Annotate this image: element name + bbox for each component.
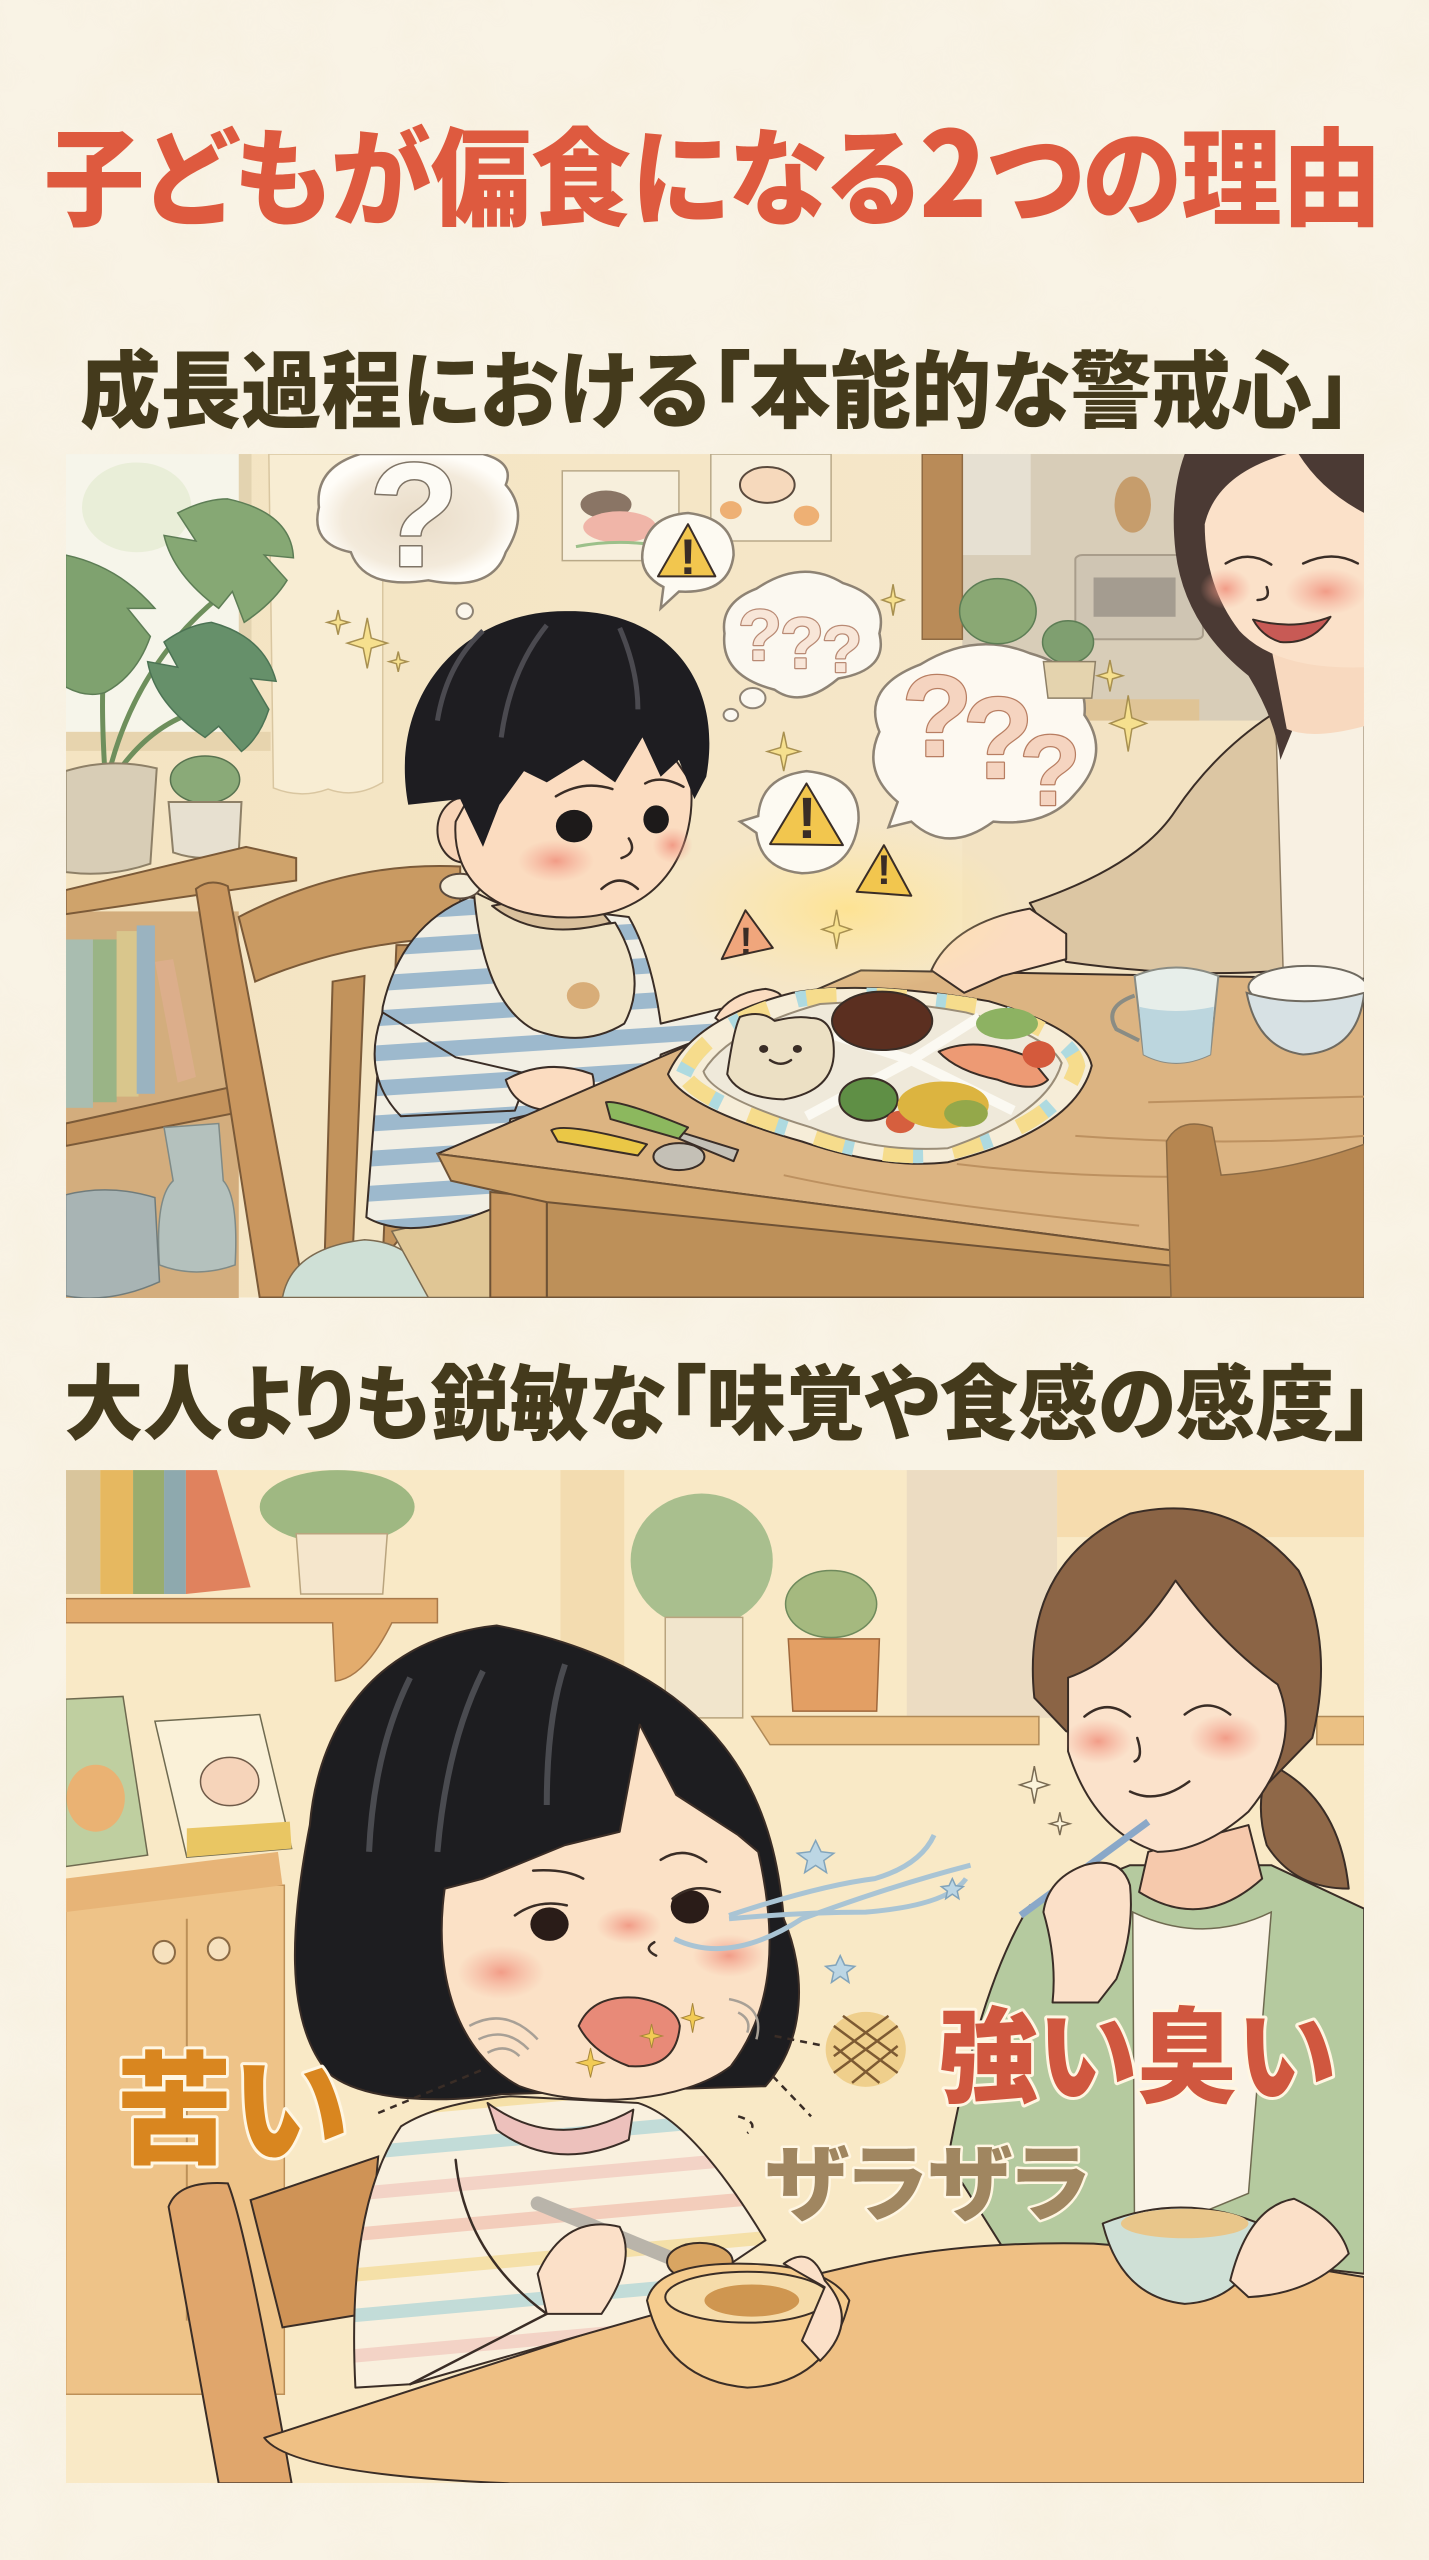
door frame: [922, 454, 962, 639]
cabinet: [66, 1852, 284, 2394]
hair: [405, 611, 709, 847]
cheeks: [457, 1946, 545, 1999]
ear: [437, 797, 492, 863]
eyes: [556, 810, 592, 842]
corn and peas: [898, 1081, 989, 1129]
label: strong smell: 強い臭い: [938, 2001, 1336, 2117]
exclamation marks: [680, 529, 891, 963]
girl's bowl and spoon: [538, 2203, 849, 2388]
question marks: middle bubble: ?: [780, 604, 824, 684]
window with light: [66, 454, 271, 751]
under table shade: [428, 1170, 1176, 1298]
mother: [1030, 454, 1367, 979]
hand: [375, 1012, 529, 1116]
mother's sparkles: [1020, 1766, 1070, 1835]
question marks: large bubble: ?: [902, 651, 972, 781]
blue stars: [797, 1840, 963, 1982]
cardigan: [948, 1865, 1364, 2274]
panel: girl sensitive to taste and texture illustration: [66, 1470, 1364, 2483]
face: [1068, 1581, 1286, 1852]
white shirt: [1133, 1912, 1271, 2240]
striped shirt: [365, 896, 722, 1230]
table: [437, 970, 1364, 1298]
table: [264, 2243, 1364, 2483]
small succulent: [169, 756, 241, 858]
title: 子どもが偏食になる2つの理由: [44, 80, 1382, 251]
rice bowl: [1247, 966, 1367, 1055]
curtain: [269, 454, 383, 794]
sparkles: [327, 584, 1146, 949]
neck: [1139, 1825, 1262, 1909]
bookshelf: [66, 847, 296, 1299]
large plant pot: [66, 763, 157, 874]
boy's hand on table: [715, 989, 782, 1029]
bib knot: [440, 874, 480, 899]
monstera plant: [66, 499, 293, 771]
salmon: [939, 1044, 1048, 1087]
question marks: large bubble: ?: [963, 673, 1033, 803]
wall drawings: [562, 454, 831, 561]
glass of water: [1112, 968, 1218, 1063]
boy: [365, 611, 722, 1298]
exclamation marks: !: [740, 921, 752, 963]
chair: [169, 2157, 378, 2483]
window plant: [631, 1494, 773, 1718]
lower right shelf: [752, 1717, 1364, 1745]
thought bubble: top: [317, 454, 518, 619]
front chair: [1166, 1124, 1364, 1298]
warning triangle: top: [658, 524, 715, 576]
hamburger steak: [832, 992, 932, 1050]
plate with food: [668, 988, 1092, 1164]
tongue: [579, 1997, 680, 2066]
girl: [295, 1625, 799, 2388]
window frames: [560, 1470, 1364, 1735]
smell waves: [674, 1835, 971, 1949]
glow: [674, 824, 1021, 993]
face: [455, 704, 692, 917]
label: bitter: 苦い: [116, 2044, 348, 2180]
question mark: top bubble: ?: [369, 433, 459, 598]
chair: [196, 866, 460, 1298]
panel: boy wary of food illustration: [66, 433, 1367, 1299]
cutlery: [551, 1102, 738, 1170]
heading: reason 2: 大人よりも鋭敏な「味覚や食感の感度」: [64, 1360, 1374, 1451]
top shelf: [66, 1599, 437, 1681]
dashed pointers: [378, 2036, 825, 2133]
exclamation marks: !: [797, 786, 817, 851]
shelf plant: [260, 1470, 415, 1594]
question marks: middle bubble: ?: [822, 612, 862, 686]
mother's bowl and hand: [1103, 2199, 1349, 2304]
cheeks: [518, 840, 594, 882]
sleeve line: [410, 2160, 547, 2384]
thought bubble: large: [873, 644, 1096, 838]
hair back: [295, 1625, 799, 2099]
warning bubble: middle: [740, 771, 859, 873]
hand with fork: [1043, 1863, 1131, 2003]
legs: [390, 1211, 490, 1298]
warning triangle: middle: [770, 783, 843, 845]
thought bubble: middle: [724, 572, 881, 721]
heading: reason 1: 成長過程における「本能的な警戒心」: [80, 345, 1352, 439]
top bookshelf books: [66, 1470, 251, 1594]
fork: [1021, 1822, 1148, 1915]
brows and mouth: [556, 780, 683, 889]
exclamation marks: !: [680, 529, 696, 585]
windowsill succulents: [960, 579, 1095, 698]
broccoli: [839, 1078, 898, 1121]
terracotta succulent: [786, 1571, 879, 1711]
mother: [948, 1508, 1364, 2274]
hair: [1033, 1508, 1321, 1785]
warning triangle: right: [857, 845, 911, 896]
question marks: large bubble: ?: [1019, 715, 1081, 827]
warning triangle: salmon: [722, 910, 773, 959]
vase and bowls: [66, 1124, 236, 1298]
brows and nose: [515, 1853, 720, 1956]
question marks: middle bubble: ?: [738, 596, 782, 676]
bib: [474, 892, 635, 1038]
eyes: [530, 1907, 569, 1941]
ponytail: [1261, 1765, 1349, 1889]
kitchen background: [962, 454, 1268, 721]
texture circle icon: [826, 2012, 906, 2087]
label: rough texture: ザラザラ: [764, 2138, 1090, 2232]
warning bubble: top: [642, 513, 734, 608]
collar: [488, 2103, 633, 2154]
picture books: [66, 1696, 292, 1867]
cheek swirls: [469, 1999, 758, 2056]
question marks: large bubble: [902, 651, 1081, 827]
rice bear: [727, 1014, 834, 1099]
exclamation marks: !: [877, 846, 891, 893]
taste sparkles: [577, 2003, 704, 2078]
question marks: middle bubble: [738, 596, 862, 686]
striped body: [354, 2096, 765, 2388]
face: [442, 1725, 770, 2100]
mother's hand gesture: [931, 909, 1066, 993]
